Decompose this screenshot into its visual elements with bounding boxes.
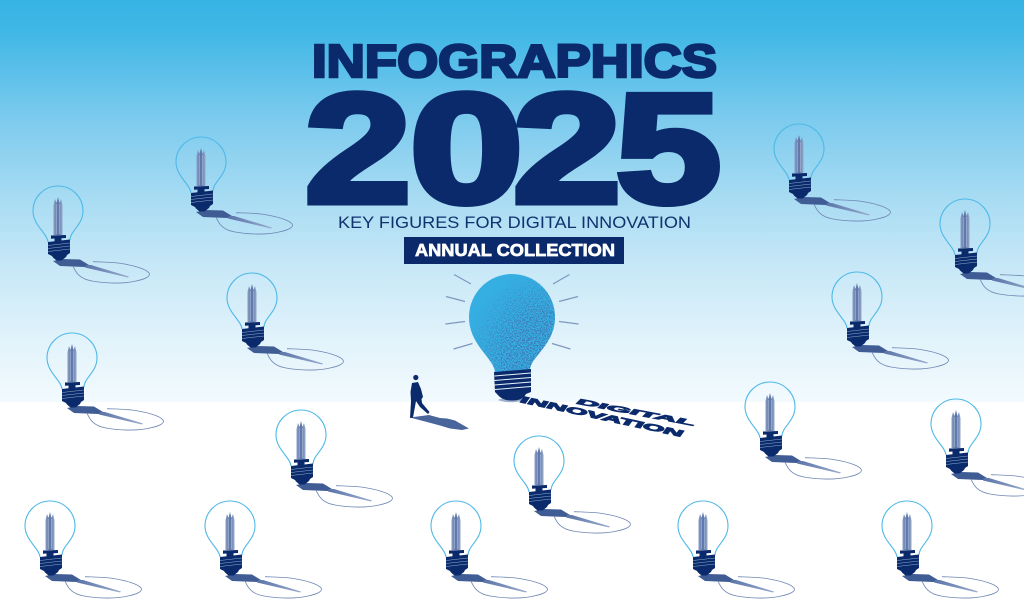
- floor text: digital innovation: INNOVATION: [517, 395, 687, 439]
- icon: bulb 10: [678, 501, 794, 598]
- badge: annual collection: ANNUAL COLLECTION: [415, 240, 615, 260]
- icon: bulb 1: [33, 186, 149, 283]
- icon: bulb 16: [774, 124, 890, 221]
- icon: bulb 4: [47, 333, 163, 430]
- title: Infographics: INFOGRAPHICS: [312, 35, 717, 87]
- icon: bulb 3: [227, 273, 343, 370]
- light rays: [446, 274, 578, 349]
- title: 2025: 5: [616, 62, 721, 235]
- title: 2025: 2: [513, 62, 621, 235]
- icon: central light bulb: [446, 270, 578, 402]
- icon: bulb 12: [745, 382, 861, 479]
- floor: [0, 402, 1024, 602]
- icon: bulb 14: [832, 272, 948, 369]
- badge: annual collection: [404, 237, 624, 264]
- icon: bulb 6: [514, 436, 630, 533]
- title: 2025: [305, 62, 721, 235]
- icon: bulb 9: [431, 501, 547, 598]
- icon: bulb 15: [940, 199, 1024, 296]
- sky background: [0, 0, 1024, 402]
- icon: bulb 5: [276, 410, 392, 507]
- title: 2025: 0: [410, 62, 523, 235]
- icon: bulb 11: [882, 501, 998, 598]
- title: 2025: 2: [305, 62, 411, 235]
- icon: bulb 7: [25, 501, 141, 598]
- icon: walking person with shadow: [410, 375, 469, 430]
- floor text: digital innovation: DIGITAL: [573, 398, 700, 428]
- icon: bulb 2: [176, 137, 292, 234]
- icon: bulb 8: [205, 501, 321, 598]
- floor text: digital innovation: [517, 395, 700, 439]
- icon: bulb 13: [931, 399, 1024, 496]
- subtitle: KEY FIGURES FOR DIGITAL INNOVATION: [338, 213, 691, 232]
